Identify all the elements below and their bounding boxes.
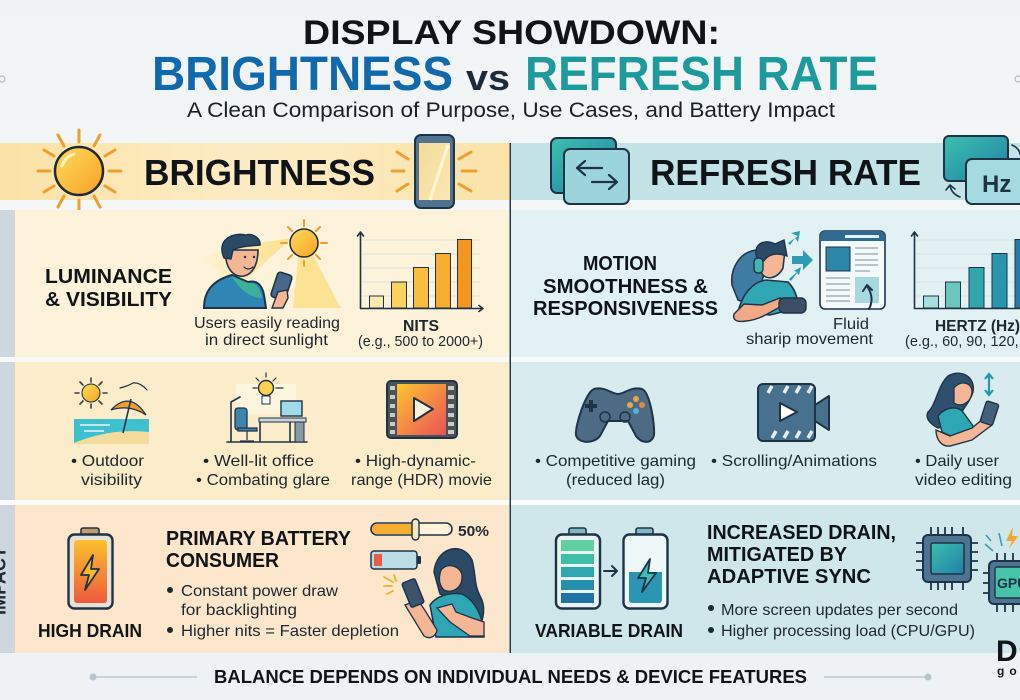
- icon: sun: [38, 130, 121, 212]
- heading: variable drain: VARIABLE DRAIN: [535, 621, 683, 641]
- list: HDR movie: range (HDR) movie: [351, 472, 492, 489]
- heading: primary battery consumer: PRIMARY BATTERY: [166, 528, 352, 550]
- heading: refresh rate: REFRESH RATE: [650, 152, 921, 193]
- heading: motion smoothness: SMOOTHNESS &: [543, 276, 708, 298]
- caption: reading in sunlight: in direct sunlight: [205, 332, 329, 349]
- panel: motion row: [511, 210, 1020, 357]
- heading: primary battery consumer: [166, 528, 352, 572]
- list: drain points: More screen updates per second: [721, 602, 958, 619]
- heading: luminance and visibility: [45, 266, 173, 311]
- list: outdoor visibility: visibility: [81, 472, 142, 489]
- icon: low battery: [371, 551, 421, 569]
- icon: office: [227, 373, 307, 442]
- icon: woman with phone: [927, 373, 999, 446]
- list: competitive gaming: • Competitive gaming: [535, 453, 696, 470]
- list: battery points: [167, 583, 399, 640]
- list: scrolling: • Scrolling/Animations: [711, 453, 877, 470]
- icon: game controller: [576, 388, 654, 442]
- heading: luminance and visibility: & VISIBILITY: [45, 289, 173, 311]
- caption: nits: NITS: [403, 318, 439, 335]
- bar chart: nits: [358, 232, 483, 312]
- caption: fluid movement: sharip movement: [746, 331, 874, 348]
- panel: brightness header: [0, 130, 509, 212]
- icon: CPU chip: [916, 527, 978, 590]
- center divider: [510, 143, 511, 653]
- icon: beach: [74, 378, 149, 444]
- heading: increased drain: ADAPTIVE SYNC: [707, 566, 871, 588]
- icon: GPU chip: [983, 527, 1020, 612]
- list: outdoor visibility: [71, 453, 145, 489]
- icon: brightness slider: [371, 519, 489, 540]
- list: daily use: video editing: [915, 472, 1012, 489]
- heading: high drain: HIGH DRAIN: [38, 621, 142, 641]
- edge markers: [0, 76, 1020, 82]
- panel: refresh battery impact: [511, 505, 1020, 653]
- icon: gamer: [732, 231, 813, 321]
- icon: Hz screens: [944, 136, 1020, 204]
- list: outdoor visibility: • Outdoor: [71, 453, 145, 470]
- list: battery points: for backlighting: [181, 602, 297, 619]
- list: HDR movie: • High-dynamic-: [355, 453, 476, 470]
- panel: luminance row: [0, 210, 509, 357]
- icon: overlapping screens: [551, 138, 629, 204]
- title: BRIGHTNESS: [152, 48, 453, 101]
- icon: person in sunlight: [198, 220, 341, 308]
- icon: high drain battery: [68, 528, 112, 608]
- list: office and glare: • Well-lit office: [203, 453, 314, 470]
- caption: reading in sunlight: Users easily reading: [194, 315, 340, 332]
- panel: brightness battery impact: [0, 505, 509, 653]
- icon: brightness slider: 50%: [458, 523, 489, 540]
- icon: phone: [392, 135, 476, 208]
- icon: browser page: [820, 231, 885, 309]
- panel: refresh rate header: [511, 136, 1020, 204]
- footer text: BALANCE DEPENDS ON INDIVIDUAL NEEDS & DEVICE FEATURES: [214, 667, 807, 687]
- subtitle: A Clean Comparison of Purpose, Use Cases, and Battery Impact: [187, 99, 835, 122]
- heading: luminance and visibility: LUMINANCE: [45, 266, 172, 288]
- caption: fluid movement: Fluid: [833, 316, 869, 333]
- list: daily use: • Daily user: [915, 453, 1000, 470]
- heading: increased drain: INCREASED DRAIN,: [707, 522, 896, 544]
- list: HDR movie: [351, 453, 492, 489]
- heading: increased drain: MITIGATED BY: [707, 544, 848, 566]
- heading: motion smoothness: RESPONSIVENESS: [533, 298, 718, 320]
- list: daily use: [915, 453, 1012, 489]
- caption: nits: (e.g., 500 to 2000+): [358, 334, 483, 350]
- heading: primary battery consumer: CONSUMER: [166, 550, 280, 572]
- list: drain points: Higher processing load (CPU/GPU): [721, 623, 975, 640]
- caption: nits: [358, 318, 483, 350]
- icon: Hz screens: Hz: [982, 171, 1011, 198]
- icon: woman using phone: [384, 549, 484, 638]
- list: competitive gaming: [535, 453, 696, 489]
- list: battery points: Higher nits = Faster depletion: [181, 623, 399, 640]
- heading: brightness: BRIGHTNESS: [144, 152, 375, 193]
- list: competitive gaming: (reduced lag): [566, 472, 665, 489]
- list: office and glare: [196, 453, 330, 489]
- bar chart: hertz: [912, 232, 1020, 308]
- panel: refresh use cases: [511, 362, 1020, 500]
- title: [152, 14, 878, 101]
- list: office and glare: • Combating glare: [196, 472, 330, 489]
- title: DISPLAY SHOWDOWN:: [303, 14, 720, 52]
- footer band: [0, 653, 1020, 700]
- icon: video camera: [758, 384, 829, 441]
- heading: increased drain: [707, 522, 896, 588]
- list: drain points: [708, 602, 975, 640]
- heading: motion smoothness: MOTION: [583, 253, 657, 275]
- logo fragment: D: [996, 635, 1018, 668]
- caption: fluid movement: [746, 316, 874, 348]
- title: vs: [466, 57, 510, 98]
- heading: motion smoothness: [533, 253, 718, 320]
- caption: hertz: [905, 318, 1020, 350]
- title: REFRESH RATE: [525, 48, 878, 101]
- icon: variable drain batteries: [556, 528, 668, 608]
- icon: film: [387, 381, 457, 438]
- panel: brightness use cases: [0, 362, 509, 500]
- list: battery points: Constant power draw: [181, 583, 338, 600]
- logo fragment: [996, 635, 1020, 678]
- caption: reading in sunlight: [194, 315, 340, 349]
